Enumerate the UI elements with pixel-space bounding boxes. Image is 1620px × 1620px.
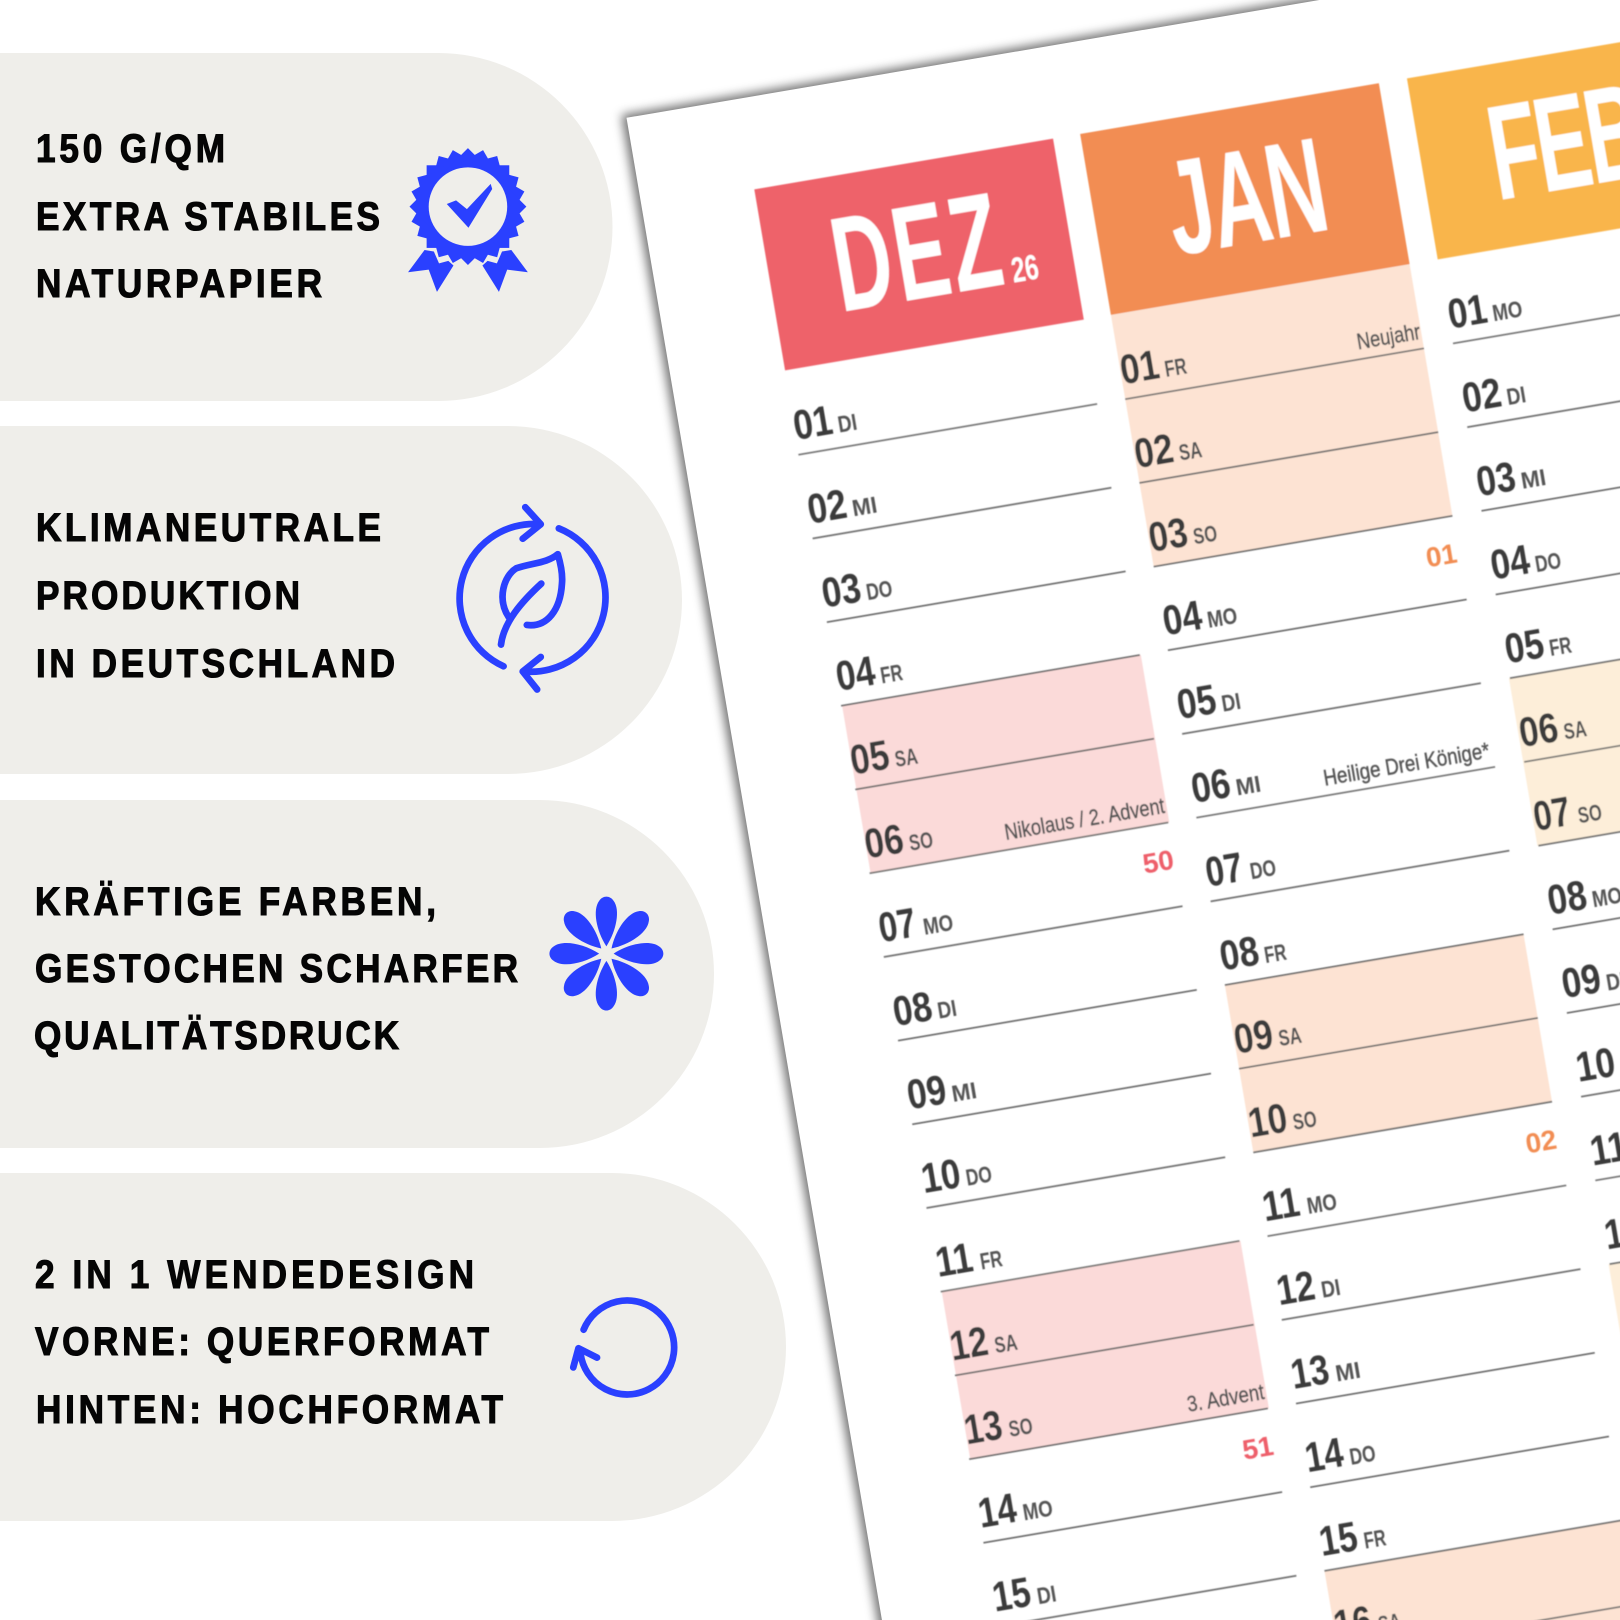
day 04 MO: MO bbox=[1205, 602, 1239, 633]
day 02 SA: SA bbox=[1177, 436, 1204, 466]
day 13 MI: MI bbox=[1333, 1357, 1362, 1386]
day 06 SA: 06 bbox=[1515, 703, 1562, 756]
text: reversible design: VORNE: QUERFORMAT bbox=[35, 1319, 489, 1363]
day 10 DO bbox=[918, 1105, 1225, 1208]
paper shadow bbox=[622, 0, 1620, 1620]
day 16 SA bbox=[1330, 1552, 1620, 1620]
day 01 DI: DI bbox=[836, 409, 859, 438]
day 05 DI: DI bbox=[1219, 688, 1243, 717]
day 12 DI: 12 bbox=[1273, 1261, 1318, 1314]
day 08 MO: 08 bbox=[1544, 871, 1590, 923]
day 06 SO with note: 06 bbox=[861, 814, 907, 867]
day 02 MI bbox=[804, 435, 1111, 538]
day 09 MI bbox=[903, 1021, 1211, 1124]
day 13 SO with note bbox=[960, 1356, 1268, 1459]
month header: JAN bbox=[1080, 83, 1410, 315]
day 01 FR with note bbox=[1116, 296, 1424, 399]
day 04 DO bbox=[1487, 491, 1620, 595]
day 01 DI bbox=[790, 352, 1097, 455]
day 06 SO with note bbox=[861, 770, 1168, 873]
text: reversible design: 2 IN 1 WENDEDESIGN bbox=[35, 1252, 474, 1296]
day 13 MI: 13 bbox=[1287, 1345, 1332, 1398]
day 02 SA bbox=[1131, 380, 1438, 483]
paper sheet bbox=[626, 0, 1620, 1620]
day 01 FR with note: FR bbox=[1163, 353, 1189, 382]
day 05 FR: FR bbox=[1547, 632, 1574, 661]
day 06 MI with note: MI bbox=[1234, 771, 1263, 800]
day 12 FR bbox=[1601, 1161, 1620, 1264]
day 11 FR: 11 bbox=[932, 1233, 976, 1286]
day 03 DO: DO bbox=[864, 575, 894, 605]
week number 51: 51 bbox=[1240, 1430, 1276, 1466]
day 10 MI bbox=[1572, 994, 1620, 1097]
day 02 MI: MI bbox=[850, 491, 879, 521]
week number 50: 50 bbox=[1140, 844, 1176, 880]
day 12 DI bbox=[1273, 1217, 1580, 1320]
text: reversible design: HINTEN: HOCHFORMAT bbox=[36, 1387, 503, 1431]
day 04 DO: DO bbox=[1533, 547, 1563, 577]
day 04 MO bbox=[1159, 547, 1467, 650]
day 14 DO: 14 bbox=[1301, 1429, 1347, 1481]
day 02 SA: 02 bbox=[1131, 424, 1177, 477]
day 05 DI bbox=[1173, 631, 1481, 734]
month header: DEZ bbox=[754, 139, 1084, 370]
day 06 SO with note: SO bbox=[907, 826, 935, 856]
day 11 MO: 11 bbox=[1259, 1178, 1303, 1230]
day 08 FR: FR bbox=[1262, 938, 1289, 968]
day 08 DI: DI bbox=[935, 995, 958, 1023]
icon: award rosette bbox=[408, 148, 528, 292]
weekend band: 11-13 bbox=[942, 1241, 1269, 1459]
day 03 MI: 03 bbox=[1473, 452, 1519, 505]
day 09 SA: 09 bbox=[1230, 1010, 1277, 1063]
day 02 DI: 02 bbox=[1458, 368, 1505, 421]
day 12 SA: 12 bbox=[946, 1317, 991, 1370]
day 07 DO: DO bbox=[1248, 854, 1278, 884]
day 05 FR bbox=[1501, 575, 1620, 678]
day 01 DI: 01 bbox=[790, 396, 836, 449]
day 12 DI: DI bbox=[1319, 1274, 1342, 1303]
day 08 FR: 08 bbox=[1216, 926, 1262, 979]
day 05 DI: 05 bbox=[1173, 675, 1220, 728]
day 10 DO: DO bbox=[964, 1161, 994, 1191]
weekend band: 12-14 bbox=[1609, 1214, 1620, 1432]
pill background bbox=[0, 53, 612, 401]
day 02 DI bbox=[1458, 324, 1620, 427]
day 09 SA: SA bbox=[1276, 1022, 1303, 1052]
day 09 DI bbox=[1558, 910, 1620, 1013]
panel: strong colours bbox=[0, 800, 714, 1148]
day 03 MI bbox=[1473, 408, 1620, 511]
day 14 MO bbox=[975, 1440, 1282, 1543]
day 11 MO bbox=[1259, 1133, 1566, 1236]
day 01 FR with note: 01 bbox=[1116, 340, 1163, 393]
day 04 FR bbox=[832, 603, 1140, 706]
day 03 SO: SO bbox=[1191, 520, 1219, 549]
day 12 SA bbox=[946, 1272, 1254, 1375]
column: Februar bbox=[1407, 27, 1620, 1432]
day 01 FR with note: Neujahr bbox=[1355, 319, 1422, 354]
day 14 DO bbox=[1301, 1384, 1609, 1487]
text: production: KLIMANEUTRALE bbox=[36, 505, 381, 549]
text: production bbox=[36, 505, 395, 685]
day 07 MO: 07 bbox=[875, 898, 919, 951]
day 02 MI: 02 bbox=[804, 480, 850, 533]
day 06 SA bbox=[1515, 659, 1620, 762]
day 11 DO bbox=[1586, 1077, 1620, 1180]
calendar poster bbox=[626, 0, 1620, 1620]
day 05 SA: SA bbox=[893, 743, 920, 772]
day 09 DI: 09 bbox=[1558, 954, 1604, 1007]
day 07 SO: SO bbox=[1576, 799, 1604, 828]
day 13 SO with note: 3. Advent bbox=[1185, 1379, 1266, 1417]
day 10 DO: 10 bbox=[918, 1149, 964, 1202]
pill background bbox=[0, 1173, 786, 1521]
day 04 FR: FR bbox=[878, 659, 905, 689]
day 09 MI: 09 bbox=[903, 1066, 950, 1118]
day 13 SO with note: 13 bbox=[960, 1401, 1006, 1453]
weekend band: 15-17 bbox=[1324, 1520, 1620, 1620]
day 06 MI with note bbox=[1187, 715, 1495, 818]
day 15 FR bbox=[1316, 1468, 1620, 1571]
weekend band: 04-06 bbox=[842, 655, 1169, 873]
day 06 SA: SA bbox=[1562, 715, 1589, 745]
week number 02: 02 bbox=[1523, 1124, 1559, 1159]
weekend band: 01-03 bbox=[1111, 264, 1452, 567]
weekend band: 08-10 bbox=[1225, 934, 1552, 1152]
day 09 MI: MI bbox=[950, 1077, 979, 1107]
day 15 DI bbox=[989, 1523, 1296, 1620]
day 07 DO: 07 bbox=[1202, 843, 1246, 895]
weekend band: 05-07 bbox=[1509, 628, 1620, 846]
text: paper quality bbox=[36, 126, 380, 305]
day 05 SA bbox=[846, 687, 1154, 790]
day 11 MO: MO bbox=[1305, 1188, 1339, 1219]
text: production: PRODUKTION bbox=[36, 573, 300, 617]
pill background bbox=[0, 800, 714, 1148]
day 14 MO: MO bbox=[1021, 1495, 1055, 1526]
text: print quality: QUALITÄTSDRUCK bbox=[34, 1013, 399, 1057]
day 04 DO: 04 bbox=[1487, 536, 1534, 589]
column: Dezember bbox=[753, 139, 1297, 1620]
day 03 DO bbox=[818, 519, 1126, 622]
icon: flower bbox=[549, 897, 663, 1011]
day 12 SA: SA bbox=[992, 1329, 1019, 1358]
text: print quality: KRÄFTIGE FARBEN, bbox=[35, 879, 436, 923]
day 06 MI with note: Heilige Drei Könige* bbox=[1321, 738, 1492, 791]
panel: reversible design bbox=[0, 1173, 786, 1521]
day 15 FR: FR bbox=[1362, 1524, 1388, 1554]
day 08 DI: 08 bbox=[889, 982, 935, 1035]
day 04 FR: 04 bbox=[832, 647, 879, 700]
month header: DEZ: DEZ bbox=[821, 163, 1012, 341]
day 14 DO: DO bbox=[1348, 1440, 1378, 1470]
day 05 FR: 05 bbox=[1501, 619, 1547, 672]
icon: leaf with cycle arrows bbox=[460, 507, 605, 690]
text: paper quality: 150 G/QM bbox=[36, 126, 225, 170]
day 11 FR bbox=[932, 1189, 1239, 1292]
day 07 MO bbox=[875, 854, 1183, 957]
day 03 SO: 03 bbox=[1145, 508, 1191, 561]
day 06 SO with note: Nikolaus / 2. Advent bbox=[1003, 793, 1166, 845]
day 15 DI: DI bbox=[1035, 1580, 1058, 1609]
month header: JAN: JAN bbox=[1155, 108, 1338, 284]
day 08 MO bbox=[1544, 826, 1620, 929]
panel: climate neutral production bbox=[0, 426, 682, 774]
day 01 MO: MO bbox=[1490, 296, 1524, 326]
day 10 SO bbox=[1244, 1049, 1552, 1152]
day 15 DI: 15 bbox=[989, 1568, 1034, 1620]
week number 01: 01 bbox=[1424, 538, 1459, 573]
day 08 DI bbox=[889, 938, 1197, 1041]
month header: DEZ: 26 bbox=[1008, 248, 1042, 291]
text: production: IN DEUTSCHLAND bbox=[36, 641, 395, 685]
panel: paper quality bbox=[0, 53, 612, 401]
day 04 MO: 04 bbox=[1159, 591, 1206, 644]
text: print quality bbox=[34, 879, 518, 1057]
day 10 SO: 10 bbox=[1244, 1094, 1291, 1147]
text: print quality: GESTOCHEN SCHARFER bbox=[35, 946, 518, 990]
day 07 SO: 07 bbox=[1530, 787, 1574, 840]
pill background bbox=[0, 426, 682, 774]
day 07 DO bbox=[1202, 798, 1509, 901]
day 07 MO: MO bbox=[921, 909, 955, 940]
column: Januar bbox=[1080, 83, 1620, 1620]
day 09 SA bbox=[1230, 966, 1538, 1069]
day 14 MO: 14 bbox=[975, 1484, 1020, 1537]
day 13 SO with note: SO bbox=[1007, 1412, 1035, 1442]
day 10 SO: SO bbox=[1291, 1106, 1319, 1135]
text: reversible design bbox=[35, 1252, 503, 1431]
day 07 SO bbox=[1530, 743, 1620, 846]
text: paper quality: NATURPAPIER bbox=[36, 261, 322, 305]
day 13 MI bbox=[1287, 1301, 1595, 1404]
day 01 MO bbox=[1444, 240, 1620, 343]
day 02 DI: DI bbox=[1505, 381, 1528, 410]
day 15 FR: 15 bbox=[1316, 1512, 1361, 1565]
icon: rotate arrow bbox=[573, 1300, 674, 1394]
day 03 MI: MI bbox=[1519, 464, 1548, 494]
day 11 FR: FR bbox=[978, 1245, 1004, 1275]
text: paper quality: EXTRA STABILES bbox=[36, 194, 380, 238]
month header: FEB bbox=[1407, 28, 1620, 259]
day 05 SA: 05 bbox=[846, 731, 893, 784]
day 08 FR bbox=[1216, 882, 1524, 985]
day 03 SO bbox=[1145, 464, 1452, 567]
day 03 DO: 03 bbox=[818, 563, 864, 616]
day 06 MI with note: 06 bbox=[1187, 759, 1234, 812]
day 01 MO: 01 bbox=[1444, 285, 1490, 338]
